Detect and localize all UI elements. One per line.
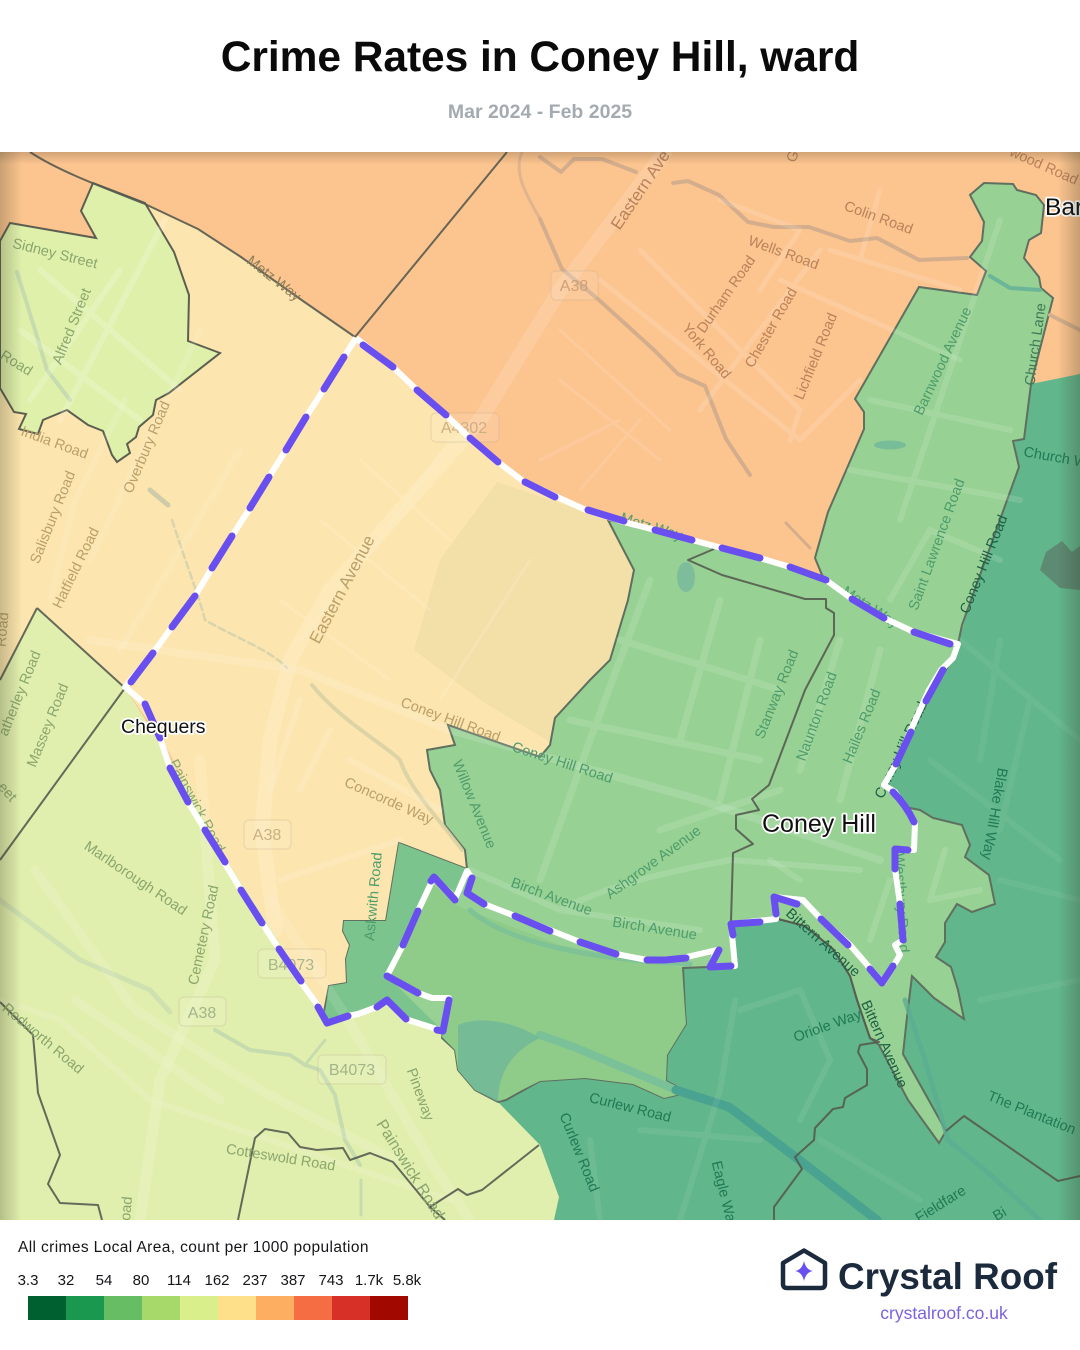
street labels: orange area: [607, 144, 1080, 402]
street labels: mid green area: Ashgrove Avenue: [603, 823, 704, 903]
road number labels: A38: [188, 1005, 216, 1022]
street labels: orange area: Durham Road: [694, 253, 759, 336]
ward: dark green east and south: [498, 374, 1080, 1220]
street labels: cream area: India Road: [19, 424, 90, 463]
colour scale legend: 80: [133, 1272, 149, 1289]
street labels: pale green area: Alfred Street: [50, 286, 95, 367]
ward: pale green west strip: [0, 608, 125, 860]
road number labels: B4073: [268, 957, 314, 974]
woodland blob: [1040, 541, 1080, 590]
street labels: orange area: Colin Road: [842, 198, 915, 238]
colour scale legend: 237: [242, 1272, 268, 1289]
street labels: pale green area: Pineway: [403, 1066, 437, 1124]
street labels: orange area: Lichfield Road: [792, 311, 841, 402]
street labels: cream area: Hatfield Road: [50, 525, 103, 611]
street labels: mid green area: Birch Avenue: [509, 875, 594, 919]
street labels: cream area: Coney Hill Road: [398, 695, 502, 746]
street labels: mid green area: Birch Avenue: [611, 914, 698, 944]
road number labels: B4073: [329, 1062, 375, 1079]
ward: orange north area: [0, 152, 1080, 1220]
logo: Crystal Roof: [780, 1248, 1058, 1297]
street labels: mid green area: Metz Way: [618, 510, 685, 544]
street labels: dark labels over boundaries and dark wards: Curlew Road: [587, 1090, 673, 1126]
ward: mid green Coney Hill: [324, 520, 995, 1143]
ward boundaries: [0, 152, 1080, 1220]
street labels: dark labels over boundaries and dark wards: [556, 302, 1080, 1231]
street labels: cream area: Eastern Avenue: [306, 532, 379, 647]
wordmark: Crystal Roof: [838, 1256, 1058, 1297]
street labels: pale green area: Massey Road: [24, 681, 72, 770]
colour scale legend: 5.8k: [393, 1272, 421, 1289]
colour scale legend: 743: [318, 1272, 344, 1289]
street labels: mid green area: Stanway Road: [752, 648, 802, 741]
street labels: pale green area: Painswick Road: [165, 757, 228, 855]
darker green ward patch south: [387, 885, 686, 1101]
ward: pale green south-west area: [0, 688, 559, 1220]
street labels: dark labels over boundaries and dark wards: Blake Hill Way: [978, 767, 1010, 862]
ward outline: violet dashes: [131, 345, 950, 1031]
street labels: orange area: York Road: [678, 321, 734, 382]
street labels: cream area: Overbury Road: [121, 399, 174, 496]
place labels: Chequers: [121, 716, 206, 738]
street labels: cream area: Concorde Way: [342, 775, 436, 828]
street labels: mid green area: Willow Avenue: [449, 758, 499, 851]
street labels: mid green area: [362, 305, 975, 953]
street labels: dark labels over boundaries and dark wards: Curlew Road: [556, 1111, 602, 1194]
street labels: mid green area: Westbury Road: [890, 853, 912, 953]
colour scale legend: 114: [167, 1272, 191, 1289]
street labels: orange area: Wells Road: [746, 233, 821, 273]
park patch in cream area: [414, 482, 634, 742]
place labels: Coney Hill: [762, 810, 876, 838]
colour scale legend: 3.3: [18, 1272, 38, 1289]
ward: pale green north-west: [0, 183, 220, 462]
road number labels: A38: [560, 278, 588, 295]
street labels: dark labels over boundaries and dark wards: Church Lane: [1022, 302, 1050, 387]
colour scale legend: 387: [280, 1272, 306, 1289]
street labels: pale green area: Redworth Road: [0, 1000, 86, 1077]
subtitle: date range: Mar 2024 - Feb 2025: [448, 101, 632, 123]
ward: cream central area: [0, 183, 634, 1012]
street labels: cream area: Metz Way: [243, 253, 304, 305]
street labels: mid green area: Askwith Road: [362, 852, 386, 942]
legend title: All crimes Local Area, count per 1000 population: [18, 1239, 369, 1256]
ward: mid green north-east strip: [815, 183, 1053, 644]
street labels: dark labels over boundaries and dark wards: Coney Hill Road: [957, 513, 1011, 616]
street labels: pale green area: Cotteswold Road: [225, 1142, 336, 1175]
ponds: [458, 440, 906, 1102]
street labels: mid green area: Metz Way: [839, 584, 902, 632]
colour scale legend: 162: [204, 1272, 230, 1289]
street labels: dark labels over boundaries and dark wards: Bittern Avenue: [782, 906, 863, 980]
title: Crime Rates in Coney Hill, ward: [221, 34, 859, 81]
street labels: cream area: Salisbury Road: [27, 469, 79, 566]
street labels: pale green area: [0, 236, 447, 1222]
choropleth map: [0, 152, 1080, 1220]
street labels: mid green area: Coney Hill Road: [510, 739, 615, 787]
street labels: dark labels over boundaries and dark wards: Bittern Avenue: [857, 998, 910, 1091]
street labels: pale green area: Sidney Street: [11, 236, 99, 272]
website url: crystalroof.co.uk: [880, 1303, 1008, 1323]
street labels: orange area: Chester Road: [742, 285, 801, 371]
place labels: [121, 194, 1080, 838]
street labels: pale green area: Marlborough Road: [81, 838, 189, 919]
street labels: cream area: [0, 253, 502, 828]
street labels: mid green area: Saint Lawrence Road: [906, 477, 968, 613]
street labels: mid green area: Hailes Road: [840, 687, 885, 766]
street labels: pale green area: Cemetery Road: [186, 884, 222, 986]
street labels: mid green area: Naunton Road: [794, 670, 841, 763]
ward outline: white base line: [125, 338, 958, 1031]
road network: [0, 152, 1080, 1220]
street labels: dark labels over boundaries and dark wards: The Plantation: [985, 1088, 1078, 1138]
road number labels: [188, 278, 588, 1079]
street labels: dark labels over boundaries and dark wards: Coney Hill Road: [872, 699, 931, 801]
colour scale legend: [18, 1272, 422, 1320]
road shields: [179, 271, 598, 1084]
colour scale legend: 1.7k: [355, 1272, 383, 1289]
road number labels: A4302: [441, 420, 487, 437]
darker green ward patch west: [325, 843, 467, 1031]
street labels: dark labels over boundaries and dark wards: Oriole Way: [791, 1006, 865, 1046]
icon: house with star: [783, 1250, 825, 1288]
street labels: pale green area: Painswick Road: [372, 1117, 447, 1220]
map edge shading: [0, 152, 1080, 1220]
colour scale legend: 32: [58, 1272, 74, 1289]
water and streams: [0, 152, 1080, 1220]
road number labels: A38: [253, 827, 281, 844]
colour scale legend: 54: [96, 1272, 112, 1289]
street labels: mid green area: Barnwood Avenue: [911, 305, 975, 418]
